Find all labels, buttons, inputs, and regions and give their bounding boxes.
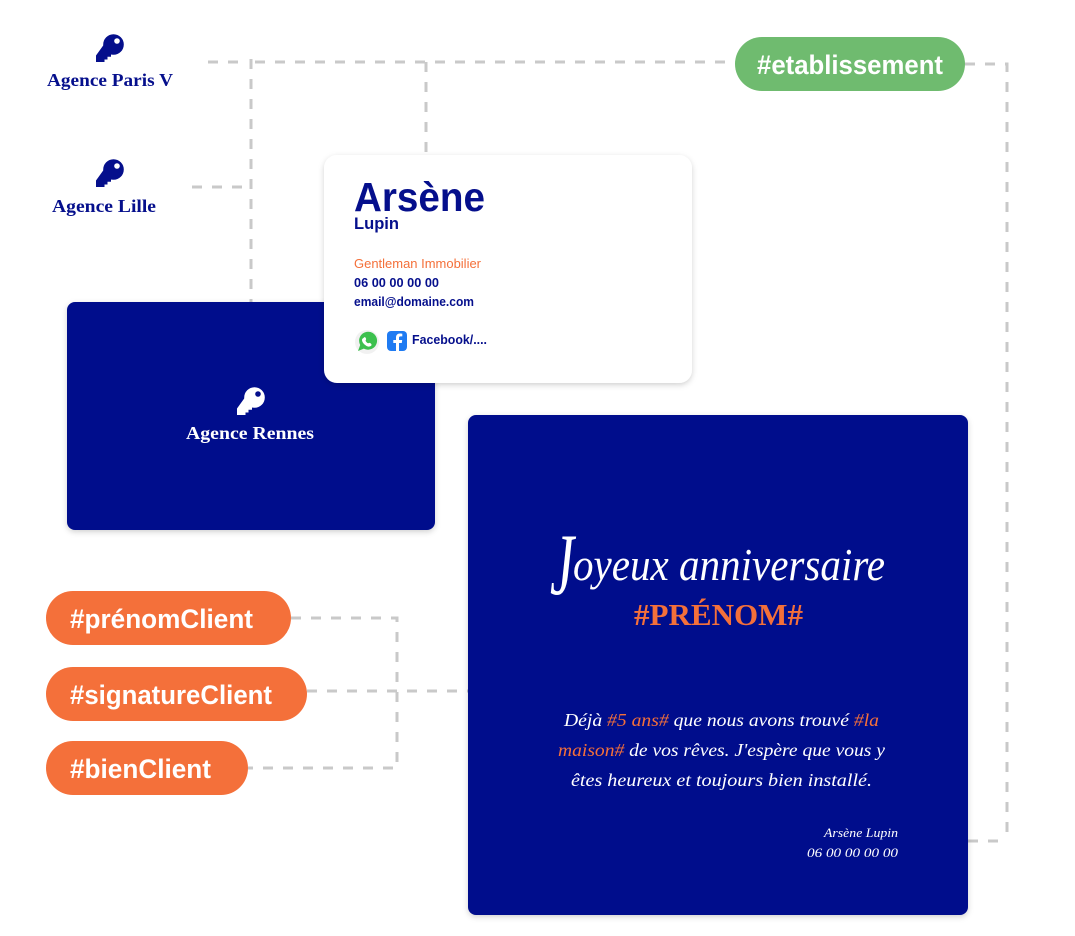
heading: Joyeux anniversaire: oyeux anniversaire — [573, 539, 885, 590]
last name: Lupin — [354, 214, 399, 233]
Facebook link: Facebook/.... — [412, 332, 487, 347]
tag: bienClient — [46, 741, 248, 795]
tag: signatureClient — [46, 667, 307, 721]
tag: prenomClient — [46, 591, 291, 645]
label: Agence Rennes: Agence Rennes — [186, 423, 314, 443]
tag: bienClient: #bienClient — [70, 754, 211, 784]
icon: key Paris — [96, 34, 124, 62]
first name: Arsène — [354, 174, 485, 220]
tag: etablissement: #etablissement — [757, 50, 943, 80]
connector lines: client tags — [248, 618, 468, 768]
heading: PRENOM: #PRÉNOM# — [634, 597, 803, 632]
agency: Lille — [52, 159, 156, 216]
message body: êtes heureux et toujours bien installé. — [571, 770, 872, 790]
icon: WhatsApp — [355, 330, 379, 354]
icon: Facebook — [387, 331, 407, 351]
message body: Déjà #5 ans# que nous avons trouvé #la — [563, 710, 879, 730]
connector lines: etablissement — [192, 59, 1007, 841]
label: Agence Lille: Agence Lille — [52, 196, 156, 216]
panel: birthday card — [468, 415, 968, 915]
panel: Agence Rennes card — [67, 302, 435, 530]
tag: prenomClient: #prénomClient — [70, 604, 253, 634]
agency: Paris V — [47, 34, 173, 90]
icon: key Rennes — [237, 387, 265, 415]
signature: 06 00 00 00 00 — [807, 845, 899, 860]
email: email@domaine.com — [354, 294, 474, 309]
job title: Gentleman Immobilier — [354, 256, 482, 271]
signature — [807, 825, 899, 860]
signature: Arsène Lupin — [823, 825, 898, 840]
tag: etablissement — [735, 37, 965, 91]
message body — [558, 710, 885, 790]
message body: maison# de vos rêves. J'espère que vous y — [558, 740, 885, 760]
label: Agence Paris V: Agence Paris V — [47, 70, 173, 90]
panel: business card — [324, 155, 692, 383]
tag: signatureClient: #signatureClient — [70, 680, 272, 710]
heading: Joyeux anniversaire: J — [550, 517, 576, 614]
phone: 06 00 00 00 00 — [354, 275, 439, 290]
icon: key Lille — [96, 159, 124, 187]
